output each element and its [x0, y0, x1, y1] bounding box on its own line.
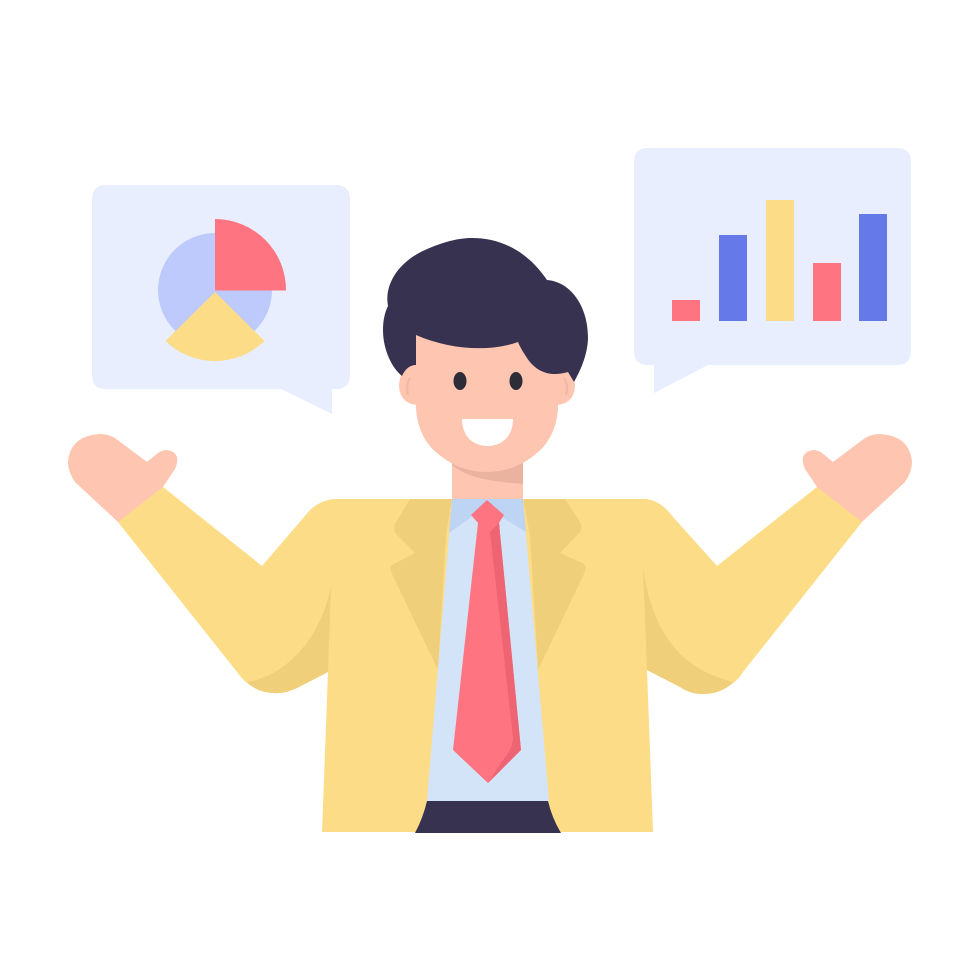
panel: pie chart speech bubble	[92, 185, 350, 414]
figure: smile	[462, 419, 513, 446]
figure: jacket and arms	[118, 487, 862, 832]
figure: neck	[452, 455, 523, 500]
panel: bar chart speech bubble	[634, 148, 911, 393]
figure: belt and trousers	[415, 801, 561, 833]
figure: left lapel	[390, 499, 452, 670]
figure: ears	[399, 364, 575, 405]
figure: face	[416, 325, 558, 472]
jacket shadow: left sleeve	[247, 587, 331, 693]
figure: collar	[449, 499, 526, 533]
figure: shirt	[427, 499, 549, 801]
figure: eyes	[454, 372, 522, 390]
figure: neck shadow	[452, 460, 523, 484]
bar chart	[672, 200, 887, 321]
figure: right lapel	[523, 499, 586, 670]
jacket shadow: right sleeve	[643, 568, 733, 694]
figure: hair	[383, 238, 588, 382]
figure: right hand	[803, 434, 912, 522]
pie chart	[158, 219, 286, 361]
figure: left hand	[68, 434, 177, 522]
figure: tie	[453, 500, 521, 783]
